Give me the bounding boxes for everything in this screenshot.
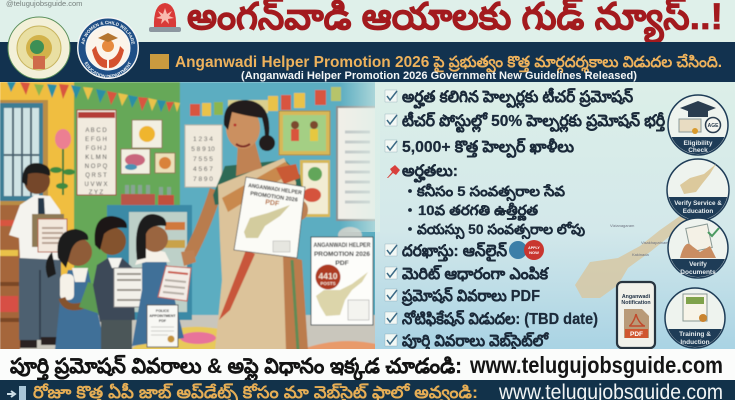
number chart (185, 125, 222, 187)
badge: verify documents: Verify (689, 261, 707, 268)
emblem: women and child welfare (77, 17, 139, 79)
student: boy in suit (93, 216, 144, 350)
alphabet chart: K L M N (85, 155, 107, 161)
badge: eligibility check: AGE (708, 123, 719, 129)
badge: training and induction: Training & (679, 331, 711, 338)
alphabet chart: Z Y Z (89, 190, 104, 196)
check item: application online: దరఖాస్తు: ఆన్‌లైన్ (402, 242, 507, 262)
alphabet chart: Q R S T (85, 173, 107, 179)
fish picture (121, 149, 150, 174)
badge: verify service and education (667, 159, 729, 222)
map: andhra pradesh: Visakhapatnam (641, 240, 669, 245)
held poster: PDF (265, 199, 280, 208)
badge: training and induction (665, 288, 725, 349)
alphabet chart: U V W X (84, 182, 108, 188)
badge: eligibility check: Eligibility (684, 140, 713, 147)
badge: verify documents: Documents (680, 269, 716, 276)
alphabet chart: E F G H (85, 137, 107, 143)
bunting flags (7, 82, 180, 112)
legend box (348, 300, 369, 320)
icon: arrow and phone (7, 386, 26, 400)
phone: notification pdf: Notification (621, 300, 651, 306)
badge: eligibility check: Check (688, 147, 708, 154)
checklist (385, 87, 666, 352)
green blouse (213, 160, 302, 205)
student: girl with green book (46, 229, 112, 350)
icon: globe with apply now: NOW (529, 250, 539, 255)
poster: 4410 posts (311, 237, 373, 325)
map (316, 272, 368, 316)
held notice (114, 268, 144, 307)
4410 posts badge: 4410 (319, 271, 338, 281)
held notice (158, 266, 191, 301)
qualification: age: వయస్సు 50 సంవత్సరాల లోపు (417, 221, 585, 240)
whiteboard list (337, 107, 380, 220)
badge: verify service and education: Verify Service & (674, 200, 722, 207)
green book (79, 282, 112, 315)
emblem: women and child welfare: AP WOMEN & CHILD WELFARE (81, 20, 135, 44)
alphabet chart: N O P Q (85, 164, 108, 170)
check item: pdf: ప్రమోషన్ వివరాలు PDF (401, 287, 540, 306)
held poster: ANGANWADI HELPER (248, 183, 302, 196)
footer bar (0, 380, 735, 400)
phone: notification pdf: PDF (630, 331, 643, 338)
call to action telugu text: పూర్తి ప్రమోషన్ వివరాలు & అప్లై విధానం ఇక్కడ చూడండి: (10, 355, 462, 384)
teacher left arm (190, 190, 216, 254)
check item: website: పూర్తి వివరాలు వెబ్‌సైట్‌లో (402, 331, 549, 352)
badge: eligibility check (668, 95, 728, 157)
circular clock or wall globe (338, 227, 362, 243)
icon: globe with apply now (509, 240, 544, 260)
flower wall art (50, 129, 75, 195)
alphabet chart: F G H J (86, 146, 106, 152)
police appointment pdf: POLICE (156, 309, 170, 313)
student: older boy (9, 163, 67, 348)
teacher (181, 100, 308, 350)
window (0, 100, 48, 205)
map: andhra pradesh (575, 214, 692, 298)
sun picture (132, 120, 162, 148)
poster: 4410 posts: PROMOTION 2026 (314, 251, 370, 258)
beige sari (215, 158, 305, 350)
subtitle bar (0, 42, 735, 82)
4410 posts badge: POSTS (320, 281, 336, 286)
check item 1: అర్హత కలిగిన హెల్పర్లకు టీచర్ ప్రమోషన్ (402, 87, 633, 109)
subtitle icon (150, 54, 169, 69)
phone: notification pdf (617, 282, 655, 348)
badge: training and induction: Induction (680, 339, 710, 346)
number chart: 7 5 5 5 (193, 156, 213, 163)
held document (32, 214, 67, 252)
blue bookshelf (107, 205, 192, 320)
student: girl in pinafore (132, 214, 191, 346)
qualifications heading with pin: అర్హతలు: (402, 163, 458, 183)
number flags (190, 87, 341, 116)
emblem: andhra pradesh government seal (8, 17, 70, 79)
police appointment pdf: PDF (159, 319, 167, 323)
badge: verify documents (668, 218, 728, 279)
icon: globe with apply now: APPLY (528, 246, 540, 250)
poster: 4410 posts: PDF (335, 260, 349, 267)
check item: merit: మెరిట్ ఆధారంగా ఎంపిక (402, 265, 550, 283)
header background (0, 0, 735, 42)
map: andhra pradesh: Kakinada (632, 252, 649, 257)
number chart: 7 8 9 0 (193, 176, 213, 183)
subtitle text: Anganwadi Helper Promotion 2026 పై ప్రభుత్వం కొత్త మార్గదర్శకాలు విడుదల చేసింది. (175, 53, 722, 74)
call to action band (0, 349, 735, 384)
panel: classroom illustration (0, 82, 380, 350)
picture frame: children (279, 111, 330, 155)
badge: verify service and education: Education (683, 208, 713, 215)
teacher right hand (292, 200, 308, 220)
check item: notification date: నోటిఫికేషన్ విడుదల: (TBD date) (402, 309, 598, 328)
qualification: service: కనీసం 5 సంవత్సరాల సేవ (416, 183, 565, 202)
picture frame: bird (300, 160, 330, 217)
police appointment pdf: APPOINTMENT (149, 314, 176, 318)
map: andhra pradesh: Vizianagaram (610, 223, 635, 228)
number chart: 1 2 3 4 (193, 136, 213, 143)
4410 posts badge (316, 264, 340, 290)
teacher neck and head (236, 142, 262, 176)
alphabet chart: A B C D (85, 128, 107, 134)
police appointment pdf (147, 305, 178, 347)
poster: 4410 posts: ANGANWADI HELPER (314, 242, 371, 249)
wooden toy shelf (0, 205, 22, 350)
check item 3: 5,000+ కొత్త హెల్పర్ ఖాళీలు (402, 137, 574, 158)
qualification: 10th: 10వ తరగతి ఉత్తీర్ణత (418, 202, 538, 221)
test tubes on shelf (121, 185, 174, 205)
held poster: PROMOTION 2026 (250, 191, 298, 204)
number chart: 4 5 6 7 (193, 166, 213, 173)
check item: website (385, 331, 549, 352)
alert siren icon (149, 3, 181, 32)
number chart: 5 8 9 10 (191, 146, 215, 153)
subtitle english translation: (Anganwadi Helper Promotion 2026 Government New Guidelines Released) (241, 70, 637, 82)
check item 2: టీచర్ పోస్టుల్లో 50% హెల్పర్లకు ప్రమోషన్ భర్తీ (402, 111, 666, 133)
check item 1 (385, 87, 633, 109)
panel: right details background (375, 82, 735, 350)
held poster (234, 177, 305, 258)
phone: notification pdf: Anganwadi (622, 294, 651, 300)
alphabet chart (77, 110, 116, 196)
emblem: women and child welfare: EDUCATION DEPARTMENT (84, 62, 132, 78)
orange sun picture (155, 153, 175, 173)
qualifications heading with pin (387, 163, 458, 183)
left fade of panel (340, 82, 380, 232)
